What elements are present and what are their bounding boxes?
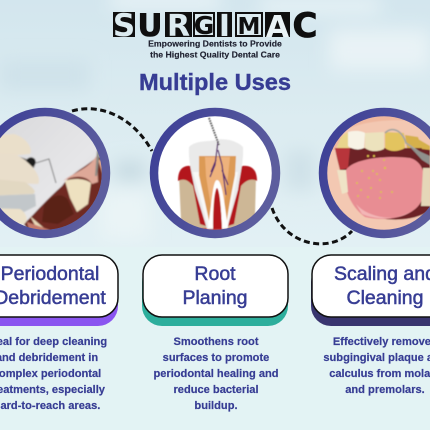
logo: SURGIMAC: A [266, 10, 290, 45]
logo: SURGIMAC: S [113, 8, 135, 44]
scaler [384, 128, 420, 152]
card: Periodontal Debridement: Periodontal [1, 263, 99, 285]
file [209, 118, 219, 145]
instrument [36, 159, 56, 183]
logo: SURGIMAC: I [219, 9, 230, 44]
logo: SURGIMAC: G [194, 11, 214, 40]
description: root planing [153, 336, 279, 412]
upper lip [63, 155, 98, 184]
description: root planing: periodontal healing and [153, 368, 279, 380]
lower teeth [337, 170, 348, 194]
mouth interior [335, 148, 430, 220]
background [0, 0, 430, 196]
connector: left to middle [72, 109, 152, 151]
logo: SURGIMAC: R [167, 9, 190, 44]
photo circle: tooth root illustration [154, 112, 276, 234]
connector: middle to right [272, 208, 352, 244]
crown [189, 139, 243, 229]
photo circle: mouth with plaque [323, 112, 430, 234]
description: root planing: reduce bacterial [173, 384, 259, 396]
plaque specks [356, 155, 393, 199]
mouth [24, 156, 105, 233]
tagline [148, 38, 282, 60]
tagline: the Highest Quality Dental Care [150, 50, 280, 60]
cheek [98, 159, 102, 174]
description: root planing: surfaces to promote [163, 352, 269, 364]
photo circle: periodontal procedure [0, 112, 106, 234]
root arch [208, 180, 228, 228]
title: Multiple Uses [139, 69, 291, 95]
card: Periodontal Debridement [0, 255, 118, 326]
logo: SURGIMAC: U [137, 8, 163, 44]
pulp [199, 156, 236, 226]
tray [0, 194, 36, 214]
description: periodontal debridement [0, 336, 107, 412]
card: Root Planing: Root [194, 263, 236, 285]
gum [178, 166, 206, 226]
card: Root Planing: Planing [182, 287, 248, 309]
logo: SURGIMAC [113, 6, 317, 46]
description: scaling and cleaning: and premolars. [345, 384, 425, 396]
card: Scaling and Cleaning: Cleaning [347, 287, 423, 309]
description: root planing: buildup. [194, 400, 238, 412]
nerves [210, 141, 228, 195]
tongue [345, 157, 425, 219]
bone [179, 176, 208, 228]
glove [0, 134, 31, 158]
description: root planing: Smoothens root [173, 336, 259, 348]
description: scaling and cleaning [323, 336, 430, 396]
card: Root Planing [142, 255, 288, 326]
teeth [65, 179, 91, 212]
card: Scaling and Cleaning [311, 255, 430, 326]
teeth [337, 132, 349, 148]
tagline: Empowering Dentists to Provide [148, 38, 282, 48]
logo: SURGIMAC: M [238, 14, 260, 40]
logo: SURGIMAC: C [293, 6, 317, 46]
